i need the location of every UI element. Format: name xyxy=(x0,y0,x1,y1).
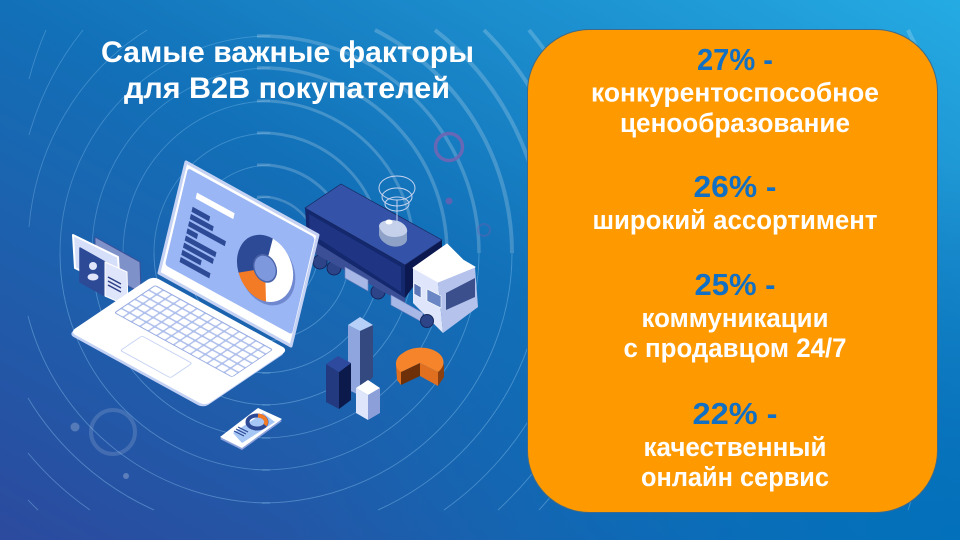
touchpad xyxy=(120,336,192,378)
cheese pie xyxy=(396,348,444,386)
stat 22% xyxy=(641,396,829,492)
laptop screen xyxy=(165,168,315,335)
truck xyxy=(305,176,478,333)
stat 26%: широкий ассортимент xyxy=(592,205,878,235)
wheels xyxy=(313,255,385,299)
dark bar xyxy=(326,356,351,409)
stat 27% xyxy=(591,42,879,138)
white bar xyxy=(356,380,380,420)
antenna xyxy=(379,176,415,247)
keyboard xyxy=(114,285,273,377)
title: Самые важные факторы xyxy=(101,36,474,69)
stat 27%: конкурентоспособное xyxy=(591,78,879,108)
laptop base xyxy=(68,276,289,408)
title xyxy=(101,36,474,105)
stat 25% xyxy=(624,267,846,363)
decorative circles xyxy=(70,134,490,479)
stat 27%: 27% - xyxy=(697,42,773,77)
front wheel xyxy=(420,314,434,328)
sidebar bars xyxy=(180,192,235,283)
bar blocks xyxy=(326,317,380,420)
laptop lid xyxy=(159,162,318,346)
stat 26% xyxy=(592,169,878,235)
icon: document cards xyxy=(73,235,141,306)
stat 22%: 22% - xyxy=(692,396,778,431)
stat 25%: коммуникации xyxy=(642,303,828,333)
laptop xyxy=(68,162,318,408)
stat 22%: качественный xyxy=(644,432,826,462)
stat 25%: 25% - xyxy=(694,267,776,302)
cab xyxy=(413,244,478,333)
donut chart xyxy=(232,224,299,312)
trailer xyxy=(305,184,442,298)
tall bar xyxy=(348,317,373,396)
stat 22%: онлайн сервис xyxy=(641,462,829,492)
chassis xyxy=(312,240,423,322)
title: для B2B покупателей xyxy=(124,72,450,105)
stat 25%: с продавцом 24/7 xyxy=(624,333,846,363)
phone xyxy=(220,408,282,450)
stat 27%: ценообразование xyxy=(620,108,850,138)
stat 26%: 26% - xyxy=(694,169,776,204)
panel: statistics xyxy=(528,30,938,512)
